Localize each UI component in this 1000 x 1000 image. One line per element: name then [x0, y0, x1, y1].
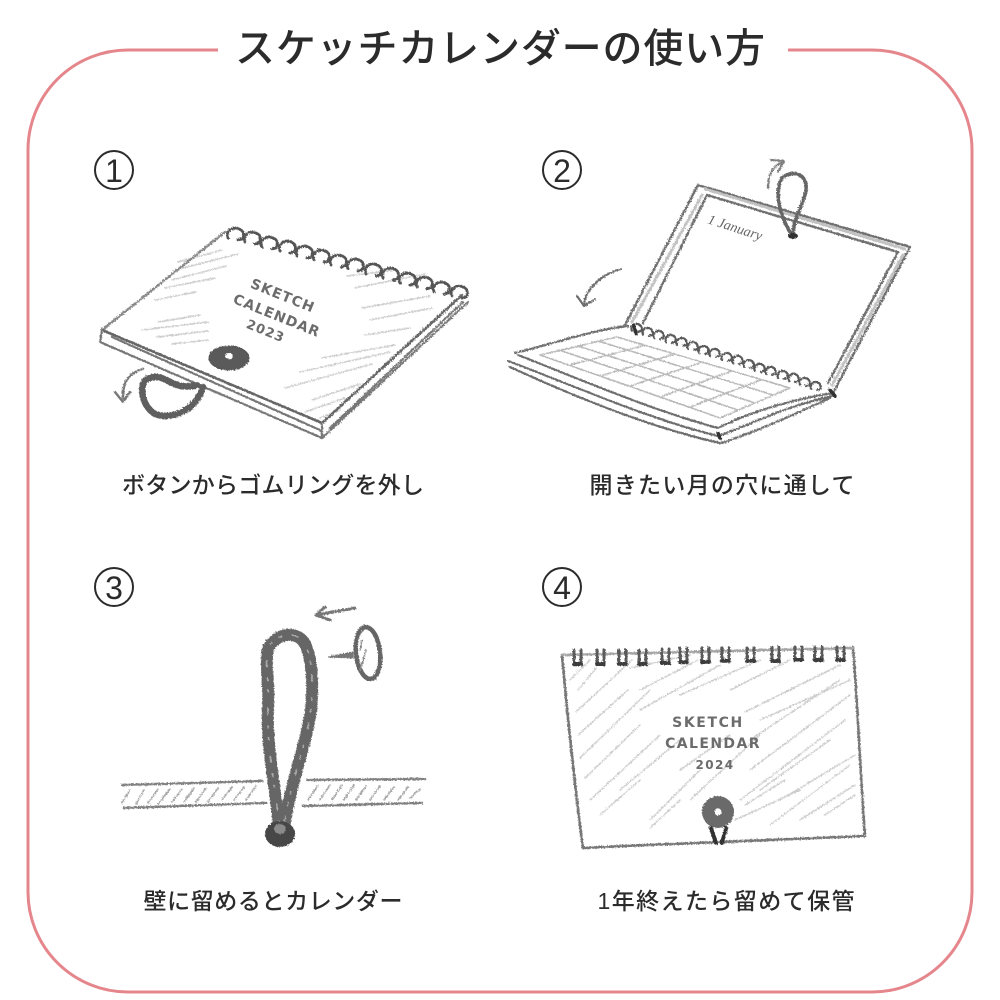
step number 1: 1 — [105, 153, 123, 189]
step number 3 — [95, 568, 133, 606]
caption 3: 壁に留めるとカレンダー — [144, 888, 402, 914]
button — [209, 346, 249, 370]
elastic ring — [142, 377, 203, 416]
panel: step 2 — [508, 151, 910, 498]
panel: step 3 — [95, 568, 425, 914]
illustration: closed calendar lying flat — [100, 228, 468, 438]
cover lettering 1: SKETCH — [248, 276, 317, 316]
step number 1 — [95, 151, 133, 189]
button and elastic — [702, 796, 734, 843]
arrow — [115, 369, 143, 402]
caption 2: 開きたい月の穴に通して — [590, 472, 854, 498]
illustration: open calendar — [508, 160, 910, 443]
arrow down — [577, 269, 621, 306]
step number 3: 3 — [105, 570, 123, 606]
step number 2: 2 — [553, 153, 571, 189]
elastic through hole — [778, 174, 806, 235]
step number 2 — [543, 151, 581, 189]
panel: step 4 — [543, 568, 865, 914]
arrow up — [768, 160, 784, 188]
push pin — [328, 626, 383, 680]
cover lettering 4 — [665, 715, 761, 772]
caption 4: 1年終えたら留めて保管 — [598, 888, 854, 914]
cover lettering 4: 2024 — [696, 758, 734, 772]
month label: 1 January — [706, 213, 765, 245]
caption 1: ボタンからゴムリングを外し — [122, 472, 424, 498]
cover lettering 4: CALENDAR — [665, 736, 761, 752]
step number 4: 4 — [553, 570, 571, 606]
title: スケッチカレンダーの使い方 — [235, 27, 765, 71]
arrow — [316, 607, 355, 620]
illustration: calendar front with loop on button — [562, 647, 865, 848]
step number 4 — [543, 568, 581, 606]
cover lettering 1: 2023 — [244, 317, 287, 346]
elastic loop — [267, 635, 312, 828]
cover lettering 4: SKETCH — [672, 715, 744, 731]
spiral binding — [574, 647, 844, 664]
cover lettering 1: CALENDAR — [231, 292, 322, 341]
panel: step 1 — [95, 151, 468, 498]
illustration: wall mounting loop — [122, 607, 425, 847]
